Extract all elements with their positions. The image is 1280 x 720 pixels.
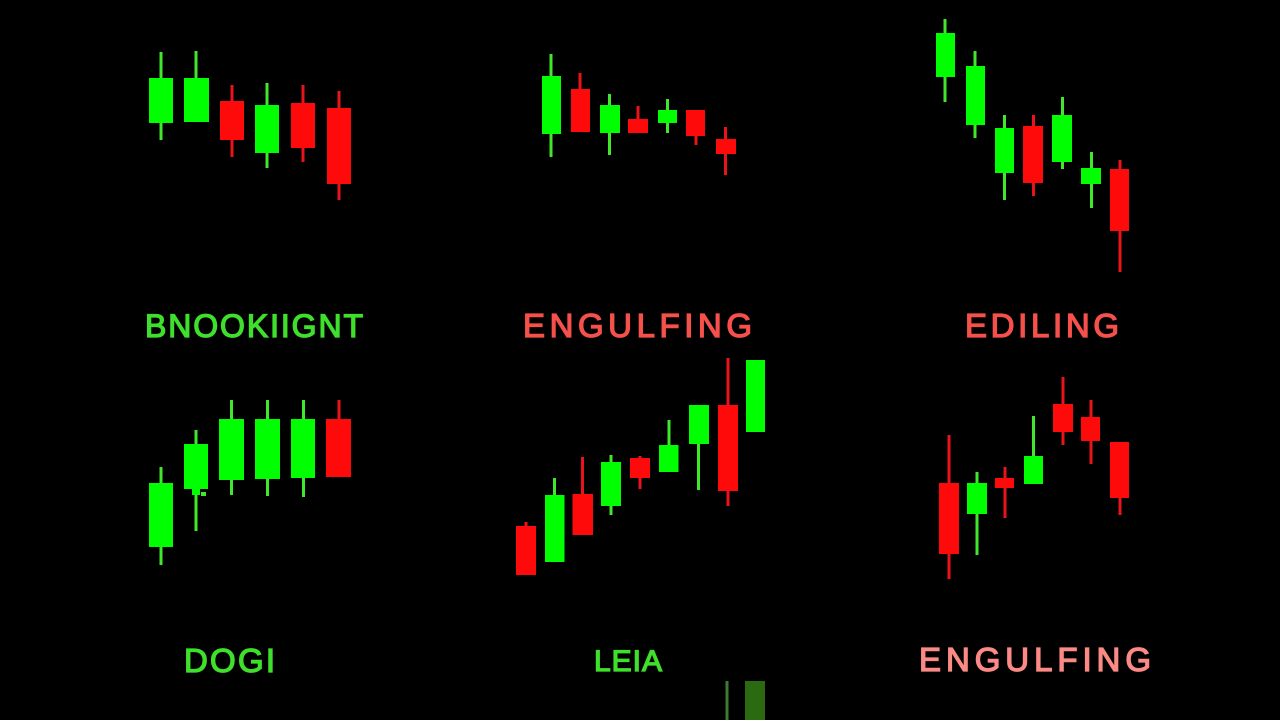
panel: bottom-left candlestick chart	[149, 400, 351, 565]
label: bottom-right pattern name: ENGULFING	[919, 641, 1151, 678]
cropped dim candle at bottom edge	[726, 681, 765, 720]
panel: top-middle candlestick chart	[542, 54, 736, 175]
label: top-left pattern name: BNOOKIIGNT	[145, 308, 363, 344]
panel: top-right candlestick chart	[936, 19, 1129, 272]
label: bottom-middle pattern name: LEIA	[594, 645, 662, 678]
label: bottom-left pattern name: DOGI	[184, 642, 275, 679]
panel: top-left candlestick chart	[149, 51, 351, 200]
label: top-right pattern name: EDILING	[965, 307, 1119, 344]
panel: bottom-right candlestick chart	[939, 377, 1129, 579]
panel: bottom-middle candlestick chart	[516, 358, 765, 575]
label: top-middle pattern name: ENGULFING	[523, 307, 752, 344]
